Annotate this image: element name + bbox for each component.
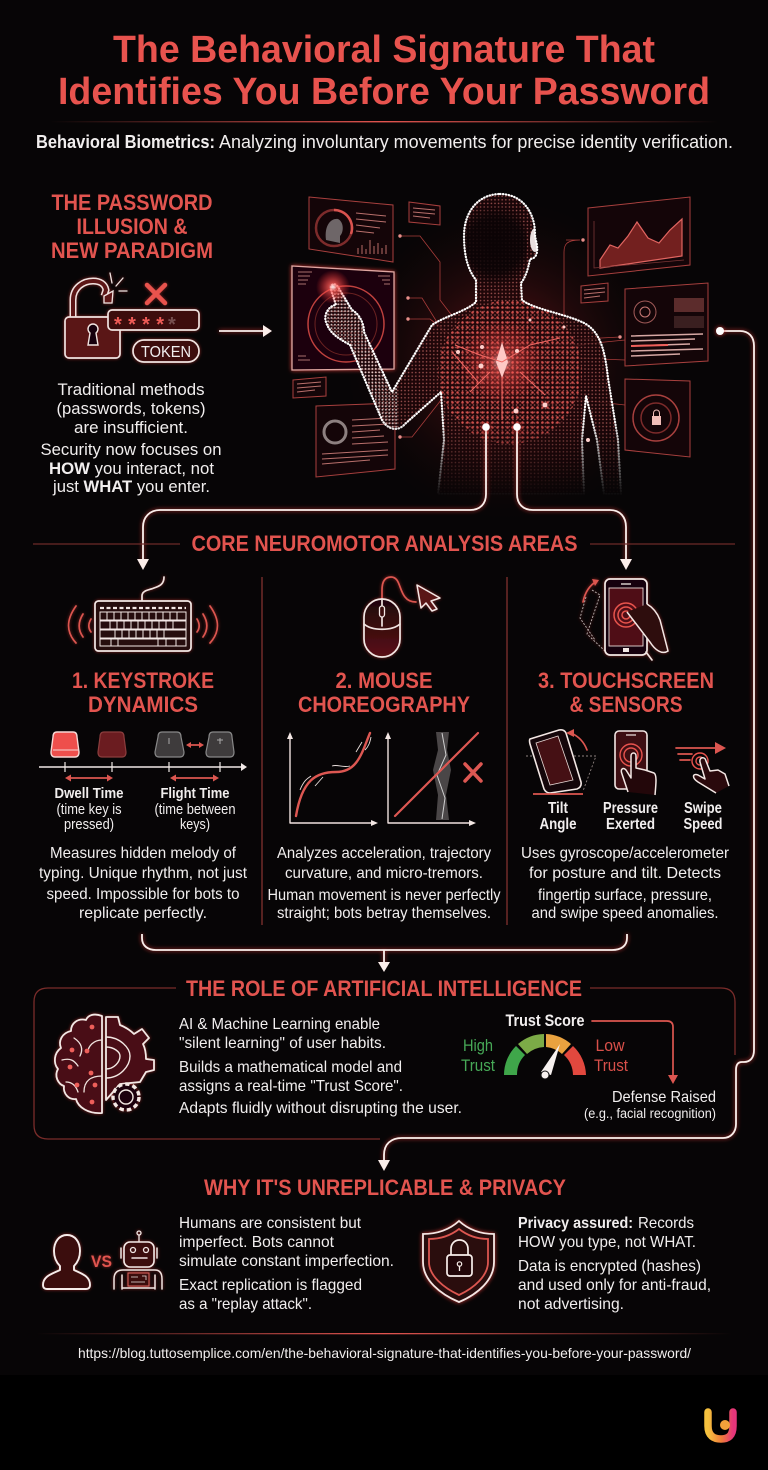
heading: touchscreen and sensors: [538, 668, 714, 717]
heading: mouse choreography: [298, 668, 470, 717]
text: AI description: Adapts fluidly without disrupting the user.: [179, 1100, 462, 1117]
text: keystroke description: typing. Unique rhythm, not just: [39, 865, 248, 882]
text: touchscreen description: Uses gyroscope/accelerometer: [521, 845, 730, 862]
icon: broken padlock with password and token: [65, 273, 199, 362]
icon: human vs robot: [43, 1231, 162, 1289]
text: traditional methods: (passwords, tokens): [56, 399, 206, 418]
text: AI description: "silent learning" of user habits.: [179, 1035, 386, 1052]
icon: human vs robot: VS: [91, 1252, 112, 1271]
labels: sensor metrics: Swipe: [684, 800, 722, 817]
text: privacy: HOW you type, not WHAT.: [518, 1234, 696, 1251]
logo: [708, 1412, 733, 1439]
panel: note left: [293, 377, 326, 398]
figure: dotted body: [322, 194, 621, 494]
heading: password illusion: [51, 190, 213, 263]
text: AI description: Builds a mathematical model and: [179, 1059, 402, 1076]
icon: tilt angle: [526, 729, 596, 794]
panel: AI frame: [34, 988, 735, 1139]
text: keystroke description: [39, 845, 248, 922]
subtitle: Behavioral Biometrics:: [36, 132, 215, 152]
labels: sensor metrics: Tilt: [548, 800, 568, 817]
icon: mouse and cursor: [364, 577, 440, 657]
connector: right side loop to privacy: [378, 327, 754, 1171]
title: Identifies You Before Your Password: [58, 71, 710, 113]
text: traditional methods: Traditional methods: [58, 380, 204, 399]
text: humans vs bots: simulate constant imperfection.: [179, 1253, 394, 1270]
title: The Behavioral Signature That: [113, 29, 655, 71]
heading: mouse choreography: CHOREOGRAPHY: [298, 692, 470, 717]
icon: broken padlock with password and token: TOKEN: [141, 344, 191, 361]
icon: brain and gears: [55, 1015, 154, 1113]
text: humans vs bots: imperfect. Bots cannot: [179, 1234, 335, 1251]
chart: trust score gauge: Trust Score: [506, 1012, 584, 1030]
text: traditional methods: just WHAT you enter.: [52, 477, 210, 496]
panel: bottom left: [316, 403, 395, 477]
chart: trust score gauge: High: [463, 1036, 493, 1055]
text: humans vs bots: [179, 1215, 394, 1313]
heading: keystroke dynamics: 1. KEYSTROKE: [72, 668, 214, 693]
connector: figure to keystroke: [137, 423, 490, 570]
icon: broken padlock with password and token: ****: [114, 314, 164, 336]
text: humans vs bots: Exact replication is flagged: [179, 1277, 362, 1294]
text: mouse description: straight; bots betray themselves.: [277, 905, 491, 922]
heading: password illusion: NEW PARADIGM: [51, 238, 213, 263]
text: mouse description: [268, 845, 500, 922]
labels: sensor metrics: Pressure: [603, 800, 658, 817]
text: keystroke description: replicate perfectly.: [79, 905, 207, 922]
text: defense raised: (e.g., facial recognition): [584, 1106, 716, 1121]
panel: lock scan: [625, 379, 690, 457]
text: privacy: not advertising.: [518, 1296, 624, 1313]
panel: chart: [588, 197, 690, 276]
chart: dwell and flight time: pressed): [64, 816, 114, 833]
text: traditional methods: are insufficient.: [74, 418, 188, 437]
chart: trust score gauge: [461, 1012, 628, 1079]
chart: dwell and flight time: Dwell Time: [54, 785, 124, 802]
source url: https://blog.tuttosemplice.com/en/the-behavioral-signature-that-identifies-you-before-your-password/: [78, 1345, 691, 1361]
heading: touchscreen and sensors: & SENSORS: [570, 692, 682, 717]
text: privacy: Data is encrypted (hashes): [518, 1258, 701, 1275]
text: privacy: and used only for anti-fraud,: [518, 1277, 711, 1294]
text: privacy: [518, 1215, 711, 1313]
heading: mouse choreography: 2. MOUSE: [336, 668, 432, 693]
heading: why unreplicable: WHY IT'S UNREPLICABLE & PRIVACY: [204, 1175, 566, 1200]
text: traditional methods: HOW you interact, not: [49, 459, 214, 478]
connector: figure to touchscreen: [513, 423, 632, 570]
icon: swipe speed: [676, 742, 729, 793]
labels: sensor metrics: Speed: [684, 816, 722, 833]
arrow: to figure: [219, 325, 272, 337]
text: touchscreen description: [521, 845, 730, 922]
panel: gesture target: [292, 266, 394, 370]
heading: keystroke dynamics: [72, 668, 214, 717]
text: touchscreen description: for posture and tilt. Detects: [529, 865, 721, 882]
illustration: dotted human with data panels: [292, 194, 708, 525]
icon: phone with touch: [580, 579, 668, 660]
text: traditional methods: Security now focuses on: [40, 440, 222, 459]
icon: pressure exerted: [615, 731, 656, 795]
chart: dwell and flight time: (time between: [154, 801, 236, 818]
glow: fingertip: [316, 270, 350, 304]
heading: password illusion: THE PASSWORD: [52, 190, 212, 215]
connector: columns to AI: [142, 934, 627, 972]
text: AI description: [179, 1016, 462, 1117]
labels: sensor metrics: Angle: [540, 816, 577, 833]
text: traditional methods: [40, 380, 222, 496]
text: privacy: Records: [638, 1215, 694, 1232]
glow: chest core: [452, 318, 590, 442]
chart: dwell and flight time: [39, 732, 247, 833]
heading: core neuromotor: CORE NEUROMOTOR ANALYSIS AREAS: [192, 531, 578, 556]
panel: face scan: [309, 197, 393, 262]
heading: touchscreen and sensors: 3. TOUCHSCREEN: [538, 668, 714, 693]
labels: sensor metrics: Exerted: [606, 816, 655, 833]
text: AI description: assigns a real-time "Trust Score".: [179, 1078, 403, 1095]
text: privacy: Privacy assured:: [518, 1215, 633, 1232]
chart: trust score gauge: Trust: [594, 1056, 628, 1075]
text: keystroke description: speed. Impossible for bots to: [46, 886, 240, 903]
panel: note right: [581, 283, 608, 303]
text: humans vs bots: as a "replay attack".: [179, 1296, 312, 1313]
heading: keystroke dynamics: DYNAMICS: [88, 692, 198, 717]
text: AI description: AI & Machine Learning enable: [179, 1016, 380, 1033]
heading: password illusion: ILLUSION &: [76, 214, 188, 239]
text: mouse description: Human movement is never perfectly: [268, 887, 500, 904]
chart: dwell and flight time: keys): [180, 816, 210, 833]
chart: human mouse trajectory: [287, 732, 378, 826]
chart: dwell and flight time: Flight Time: [160, 785, 230, 802]
panel: waves and bars: [625, 283, 708, 366]
text: touchscreen description: fingertip surface, pressure,: [538, 887, 712, 904]
icon: shield with lock: [423, 1221, 494, 1302]
chart: trust score gauge: Low: [596, 1036, 625, 1055]
subtitle: Analyzing involuntary movements for precise identity verification.: [219, 132, 733, 152]
text: defense raised: Defense Raised: [612, 1089, 716, 1106]
icon: keyboard: [68, 577, 218, 651]
traces: [400, 236, 625, 437]
text: touchscreen description: and swipe speed anomalies.: [532, 905, 718, 922]
chart: trust score gauge: Trust: [461, 1056, 495, 1075]
labels: sensor metrics: [540, 800, 722, 833]
text: mouse description: Analyzes acceleration, trajectory: [277, 845, 491, 862]
text: humans vs bots: Humans are consistent but: [179, 1215, 362, 1232]
icon: broken padlock with password and token: *: [168, 314, 176, 336]
text: defense raised: [584, 1089, 716, 1121]
heading: AI: THE ROLE OF ARTIFICIAL INTELLIGENCE: [186, 976, 582, 1001]
text: mouse description: curvature, and micro-tremors.: [285, 865, 483, 882]
panel: note top: [409, 202, 440, 225]
arrow: trust score to defense: [592, 1021, 678, 1084]
title: [58, 29, 710, 113]
chart: bot straight trajectory: [385, 732, 481, 826]
chart: dwell and flight time: (time key is: [56, 801, 122, 818]
text: keystroke description: Measures hidden melody of: [50, 845, 237, 862]
